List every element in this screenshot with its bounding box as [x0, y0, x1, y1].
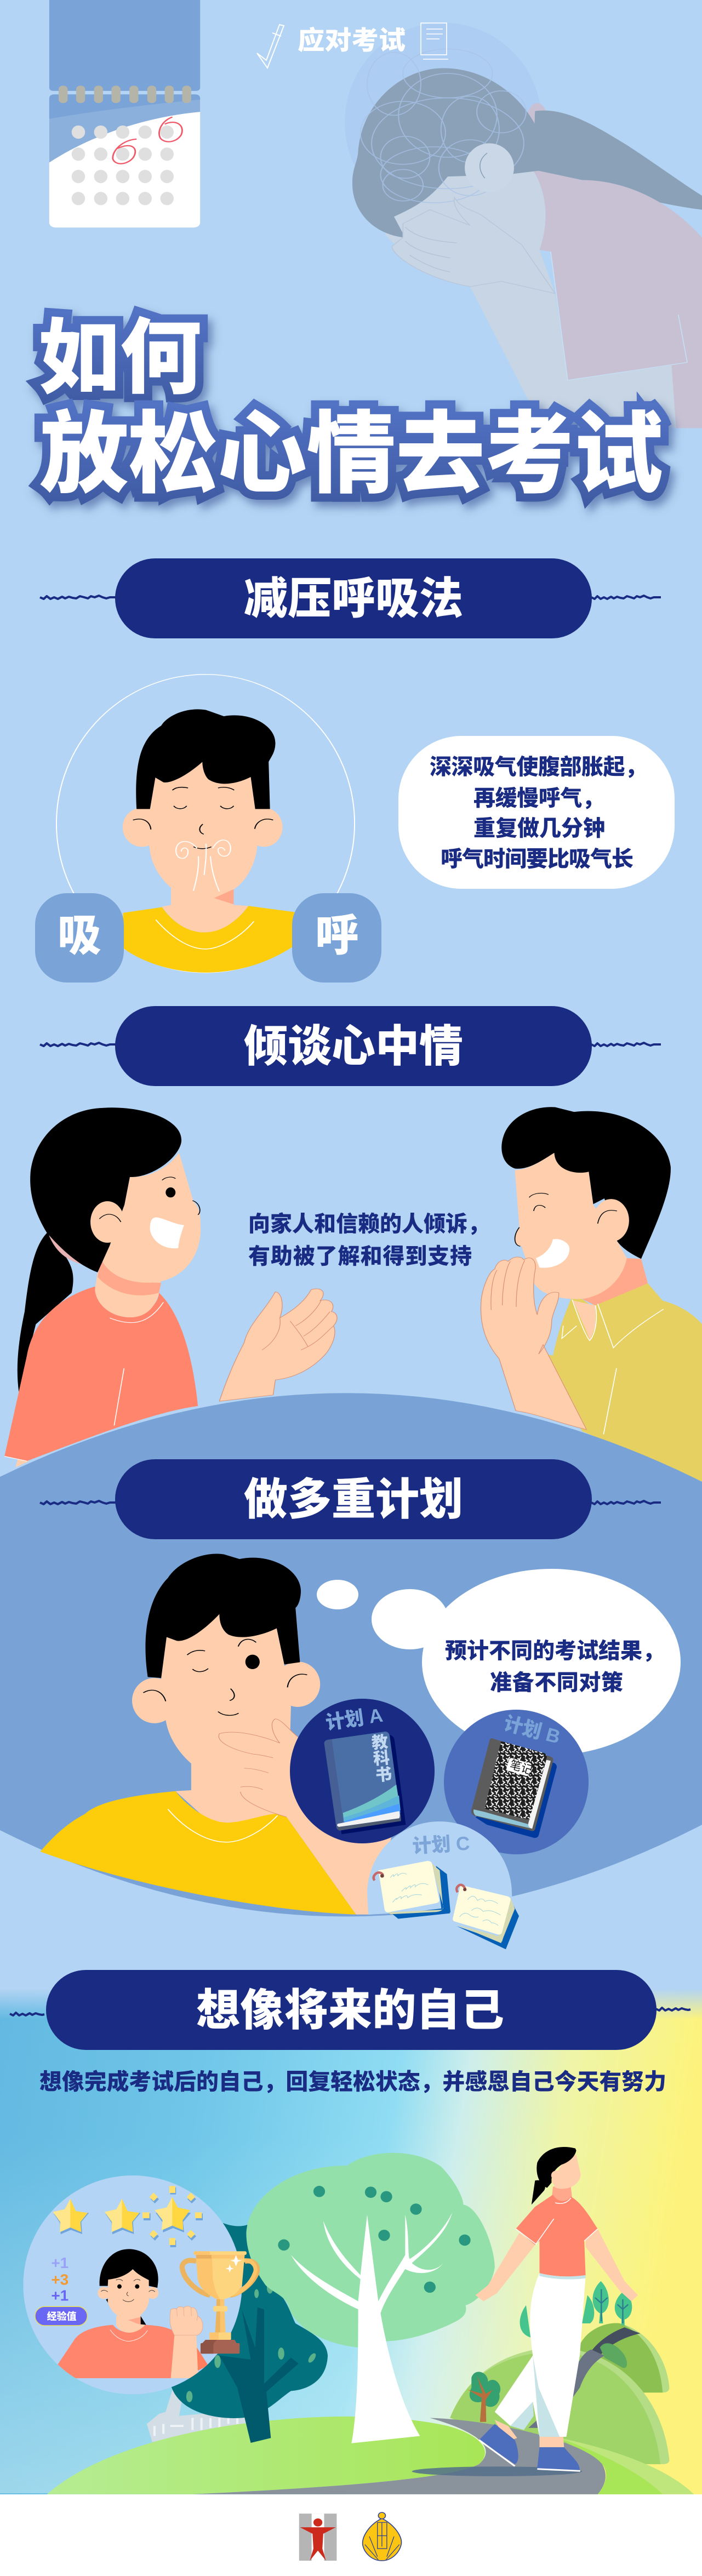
text: talk to family: 向家人和信赖的人倾诉，	[248, 1212, 489, 1236]
heading: 想像将来的自己: 想像将来的自己	[196, 1986, 504, 2035]
badge: 吸: 吸	[58, 911, 101, 960]
heading: 倾谈心中情	[40, 1006, 661, 1086]
plan B: notebook	[444, 1710, 589, 1854]
title: 放松心情去考试	[39, 404, 663, 504]
plan B: notebook: 笔记	[509, 1758, 534, 1777]
plan A: textbook: 教	[371, 1733, 389, 1752]
medallion: proud student with trophy and stars	[23, 2175, 257, 2394]
illustration: walking woman	[476, 2147, 638, 2471]
experience points: +1	[51, 2254, 69, 2271]
speech bubble: breathing instructions: 重复做几分钟	[473, 816, 605, 841]
heading: 倾谈心中情: 倾谈心中情	[244, 1022, 463, 1071]
text: talk to family	[248, 1212, 489, 1269]
text: imagine after the exam: 想像完成考试后的自己，回复轻松状态，并感恩自己今天有努力	[39, 2069, 666, 2094]
experience points: +3	[51, 2271, 69, 2288]
footer	[0, 2494, 702, 2576]
speech bubble: breathing instructions: 再缓慢呼气，	[473, 786, 604, 810]
badge: 呼	[292, 893, 381, 983]
illustration: landscape	[47, 2153, 694, 2494]
speech bubble: breathing instructions: 深深吸气使腹部胀起，	[430, 755, 647, 779]
badge: experience value	[35, 2306, 87, 2326]
thought bubble: plan for different results: 准备不同对策	[490, 1671, 623, 1695]
heading: 做多重计划	[40, 1459, 661, 1539]
experience points	[51, 2254, 69, 2304]
icon: trophy	[182, 2251, 257, 2354]
plan A: textbook: 计划 A	[324, 1705, 384, 1734]
illustration: stressed girl holding head (faded)	[345, 22, 702, 428]
badge: experience value: 经验值	[47, 2310, 77, 2322]
logo: yellow hands	[363, 2512, 401, 2561]
plan B: notebook: 计划 B	[501, 1712, 562, 1748]
heading: 减压呼吸法: 减压呼吸法	[244, 574, 463, 623]
header label: 应对考试: 应对考试	[298, 26, 406, 55]
title	[38, 312, 663, 504]
heading: 想像将来的自己	[10, 1970, 690, 2050]
plan A: textbook: 科	[373, 1749, 391, 1768]
text: talk to family: 有助被了解和得到支持	[248, 1244, 472, 1269]
heading: 减压呼吸法	[40, 558, 661, 638]
plan A: textbook: 书	[375, 1766, 393, 1785]
icon: three stars	[53, 2186, 203, 2247]
header label: 应对考试	[257, 23, 448, 68]
illustration: talking girl	[4, 1107, 337, 1467]
plan C: note cards	[367, 1821, 519, 1949]
experience points: +1	[51, 2287, 69, 2304]
title: 如何	[38, 312, 202, 404]
thought bubble: plan for different results	[317, 1569, 681, 1755]
badge: 呼: 呼	[315, 911, 359, 960]
illustration: talking boy	[481, 1107, 702, 1482]
illustration: thinking boy	[41, 1553, 392, 1915]
logo: red figure	[299, 2514, 336, 2561]
student figure	[58, 2249, 208, 2378]
thought bubble: plan for different results: 预计不同的考试结果，	[445, 1639, 664, 1663]
speech bubble: breathing instructions	[398, 736, 675, 889]
panel: future self background	[0, 1973, 702, 2494]
plan A: textbook	[290, 1699, 435, 1843]
icon: wall calendar	[49, 0, 200, 227]
illustration: breathing boy	[56, 675, 355, 973]
badge: 吸	[35, 893, 124, 983]
plan C: note cards: 计划 C	[412, 1833, 470, 1857]
heading: 做多重计划: 做多重计划	[244, 1475, 463, 1524]
speech bubble: breathing instructions: 呼气时间要比吸气长	[441, 847, 633, 871]
background panel: blue hill	[0, 1393, 702, 1917]
